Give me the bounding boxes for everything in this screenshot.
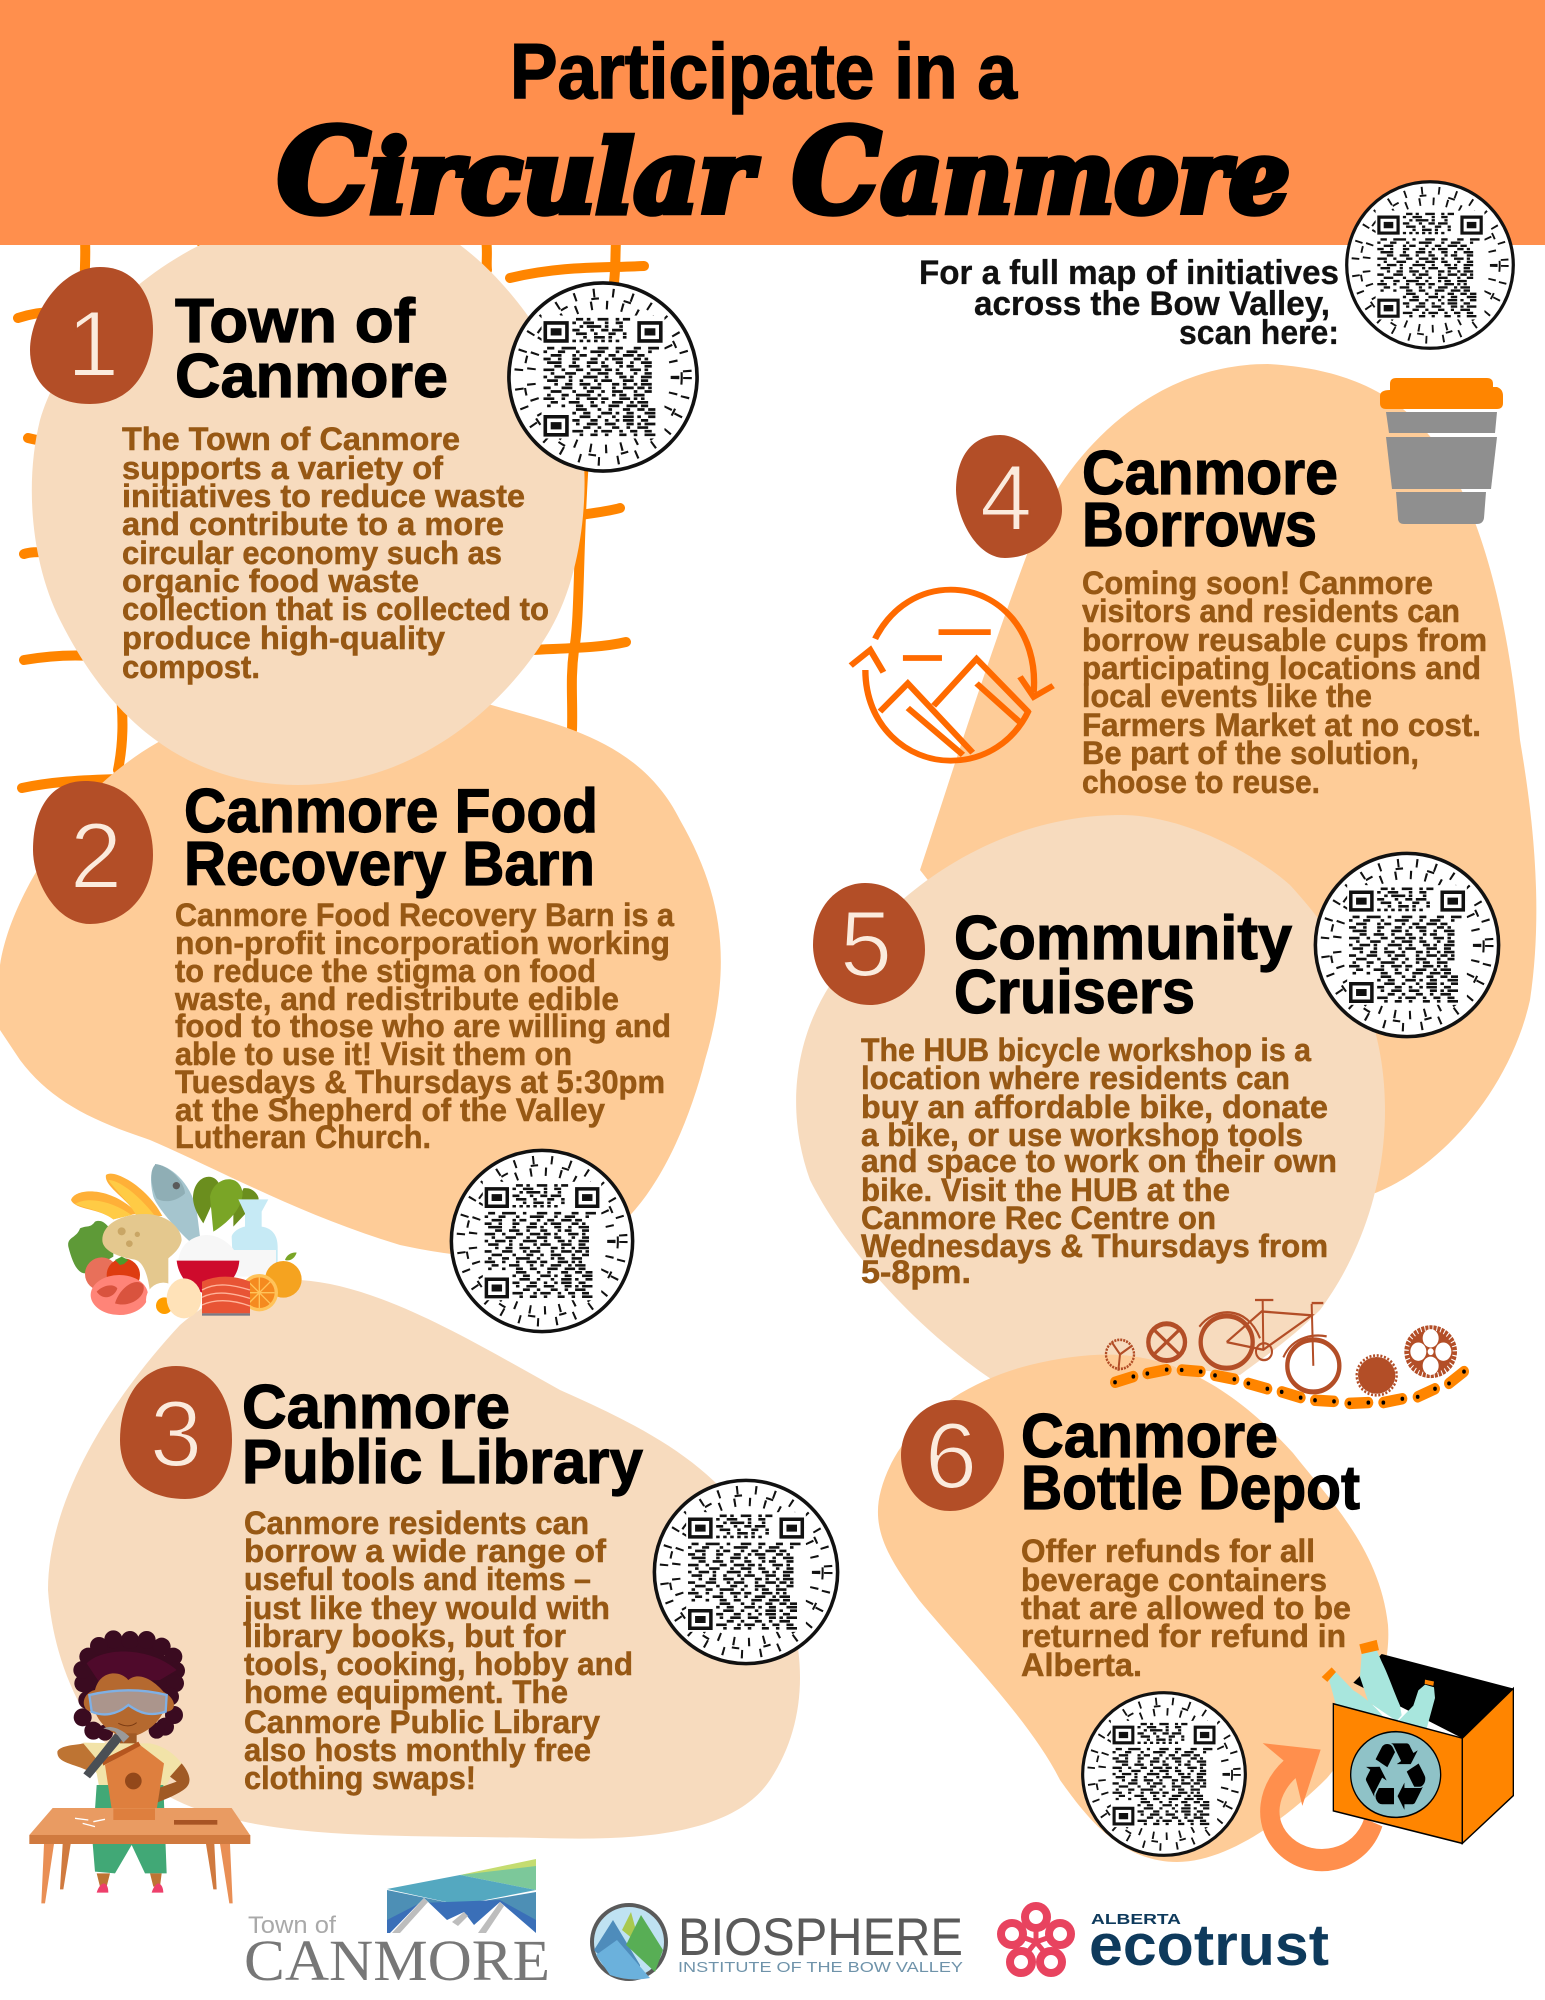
top right callout: full map of initiatives <box>919 182 1513 352</box>
body text: also hosts monthly free <box>244 1732 591 1768</box>
body text <box>122 421 549 685</box>
footer logos <box>244 1859 1329 1993</box>
QR code 6 <box>1083 1693 1245 1855</box>
body text: initiatives to reduce waste <box>122 478 525 514</box>
number badge 3: 3 <box>150 1381 202 1486</box>
QR code 2 <box>451 1150 633 1332</box>
icon: reusable cup <box>1380 378 1503 524</box>
body text: food to those who are willing and <box>175 1008 671 1044</box>
panel 1 background blob <box>32 245 585 785</box>
body text: participating locations and <box>1082 650 1481 686</box>
number badge 5 <box>813 883 925 1005</box>
heading <box>175 287 448 411</box>
body text: borrow reusable cups from <box>1082 622 1487 658</box>
QR code 5 <box>1315 853 1499 1037</box>
body text: non-profit incorporation working <box>175 925 670 961</box>
body text: and space to work on their own <box>861 1143 1337 1179</box>
orange grid background <box>18 240 644 788</box>
callout text <box>919 254 1339 352</box>
body text: home equipment. The <box>244 1674 568 1710</box>
number badge 4 <box>956 435 1062 558</box>
body text <box>243 1505 633 1796</box>
heading: Community <box>954 904 1293 973</box>
body text: to reduce the stigma on food <box>175 953 596 989</box>
logo: Town of Canmore: CANMORE <box>244 1928 550 1993</box>
heading: Public Library <box>242 1428 643 1497</box>
body text: and contribute to a more <box>122 506 504 542</box>
number badge 1: 1 <box>67 291 119 396</box>
heading <box>242 1373 643 1497</box>
QR code: full map <box>1347 182 1513 348</box>
body text: buy an affordable bike, donate <box>861 1089 1328 1125</box>
header banner <box>0 0 1545 245</box>
QR code 1 <box>509 283 697 471</box>
body text: choose to reuse. <box>1082 764 1320 800</box>
panel: Town of Canmore <box>30 267 697 685</box>
body text: library books, but for <box>244 1618 566 1654</box>
callout text: For a full map of initiatives <box>919 254 1339 292</box>
logo: Biosphere Institute: INSTITUTE OF THE BOW VALLEY <box>678 1959 963 1976</box>
body text: visitors and residents can <box>1082 593 1460 629</box>
body text: useful tools and items – <box>244 1561 591 1597</box>
title line 2 <box>277 104 1290 240</box>
body text: Canmore Food Recovery Barn is a <box>175 897 674 933</box>
number badge 5: 5 <box>840 891 892 996</box>
body text: Alberta. <box>1021 1647 1142 1683</box>
body text <box>174 897 674 1155</box>
heading <box>1021 1402 1360 1523</box>
heading <box>954 904 1293 1027</box>
body text <box>861 1032 1337 1290</box>
body text: Canmore Public Library <box>244 1704 600 1740</box>
panel: Canmore Borrows <box>851 378 1503 800</box>
title line 2: Canmore <box>792 104 1290 240</box>
body text: Be part of the solution, <box>1082 735 1419 771</box>
body text: a bike, or use workshop tools <box>861 1117 1303 1153</box>
body text <box>1082 565 1487 800</box>
heading: Canmore Food <box>184 777 598 846</box>
logo: Biosphere Institute: BIOSPHERE <box>678 1908 963 1967</box>
panel: Community Cruisers <box>813 853 1499 1403</box>
body text: able to use it! Visit them on <box>175 1036 572 1072</box>
body text: returned for refund in <box>1021 1618 1346 1654</box>
body text: that are allowed to be <box>1021 1590 1351 1626</box>
body text <box>1021 1533 1351 1683</box>
body text: compost. <box>122 649 260 685</box>
icon: circular mountains <box>851 590 1053 761</box>
body text: The Town of Canmore <box>122 421 460 457</box>
body text: Canmore Rec Centre on <box>861 1200 1216 1236</box>
logo: Town of Canmore: Town of <box>248 1912 336 1939</box>
heading: Bottle Depot <box>1021 1454 1360 1523</box>
number badge 3 <box>120 1366 232 1499</box>
heading: Canmore <box>1021 1402 1278 1471</box>
logo: Alberta Ecotrust <box>1001 1906 1329 1978</box>
icon: bicycle chain and gears <box>1106 1300 1464 1403</box>
body text: at the Shepherd of the Valley <box>175 1092 605 1128</box>
title line 1: Participate in a <box>510 27 1018 115</box>
heading: Recovery Barn <box>184 830 595 899</box>
panel 2 background blob <box>0 700 721 1258</box>
body text: borrow a wide range of <box>244 1533 606 1569</box>
logo: Town of Canmore <box>244 1859 550 1993</box>
icon: child building birdhouse at table <box>29 1630 250 1903</box>
panel 6 background blob <box>878 1355 1388 1862</box>
body text: Farmers Market at no cost. <box>1082 707 1481 743</box>
QR code 3 <box>654 1480 838 1664</box>
number badge 6: 6 <box>925 1403 977 1508</box>
number badge 2: 2 <box>70 803 122 908</box>
body text: beverage containers <box>1021 1562 1327 1598</box>
body text: supports a variety of <box>122 450 443 486</box>
body text: clothing swaps! <box>244 1760 476 1796</box>
body text: waste, and redistribute edible <box>174 981 619 1017</box>
logo: Alberta Ecotrust: ALBERTA <box>1091 1911 1181 1928</box>
number badge 6 <box>901 1400 1004 1511</box>
panel: Canmore Public Library <box>29 1366 838 1903</box>
body text: Canmore residents can <box>244 1505 589 1541</box>
number badge 1 <box>30 267 153 404</box>
icon: food group <box>68 1164 302 1318</box>
body text: organic food waste <box>122 563 419 599</box>
icon: recycling box with bottles: ♻ <box>1359 1722 1432 1832</box>
heading: Borrows <box>1082 491 1317 560</box>
body text: location where residents can <box>861 1060 1290 1096</box>
heading: Canmore <box>1082 439 1338 508</box>
body text: tools, cooking, hobby and <box>244 1646 633 1682</box>
body text: Lutheran Church. <box>175 1119 431 1155</box>
body text: local events like the <box>1082 678 1372 714</box>
body text: Tuesdays & Thursdays at 5:30pm <box>175 1064 665 1100</box>
callout text: across the Bow Valley, <box>974 285 1330 323</box>
title line 2: Circular <box>277 104 758 240</box>
body text: produce high-quality <box>122 620 445 656</box>
heading: Canmore <box>175 342 448 411</box>
callout text: scan here: <box>1179 314 1339 352</box>
body text: circular economy such as <box>122 535 502 571</box>
body text: collection that is collected to <box>122 591 549 627</box>
body text: just like they would with <box>243 1590 610 1626</box>
icon: recycling box with bottles <box>1263 1640 1513 1860</box>
logo: Biosphere Institute <box>592 1905 963 1979</box>
panel 5 background blob <box>796 815 1385 1387</box>
logo: Alberta Ecotrust: ecotrust <box>1089 1913 1329 1978</box>
heading <box>1082 439 1338 560</box>
panel: Canmore Food Recovery Barn <box>33 777 674 1332</box>
panel: Canmore Bottle Depot <box>901 1400 1513 1860</box>
heading: Canmore <box>242 1373 510 1442</box>
body text: bike. Visit the HUB at the <box>861 1172 1230 1208</box>
heading <box>184 777 598 899</box>
body text: Wednesdays & Thursdays from <box>861 1228 1328 1264</box>
heading: Town of <box>175 287 415 356</box>
body text: Offer refunds for all <box>1021 1533 1315 1569</box>
number badge 2 <box>33 781 153 924</box>
number badge 4: 4 <box>980 445 1032 550</box>
panel 3 background blob <box>48 1280 800 1839</box>
heading: Cruisers <box>954 958 1195 1027</box>
panel 4 background blob <box>920 364 1536 1195</box>
body text: 5-8pm. <box>861 1254 971 1290</box>
body text: The HUB bicycle workshop is a <box>861 1032 1311 1068</box>
body text: Coming soon! Canmore <box>1082 565 1433 601</box>
